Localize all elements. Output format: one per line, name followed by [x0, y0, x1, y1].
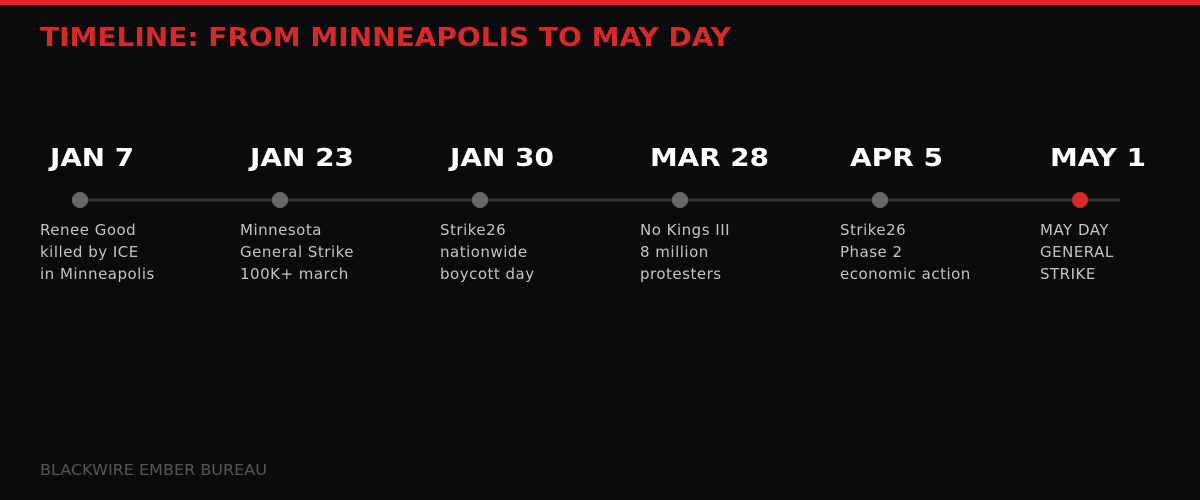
event: JAN 30: nationwide	[440, 243, 528, 261]
event: MAR 28: MAR 28	[650, 143, 769, 172]
event: MAR 28: No Kings III	[640, 221, 730, 239]
event: APR 5: APR 5	[850, 143, 943, 172]
event: MAR 28: protesters	[640, 265, 722, 283]
event: MAY 1: GENERAL	[1040, 243, 1114, 261]
event: MAY 1	[1040, 143, 1146, 283]
event: MAR 28: 8 million	[640, 243, 709, 261]
timeline line	[80, 198, 1120, 202]
event: JAN 23: Minnesota	[240, 221, 322, 239]
event: JAN 30: Strike26	[440, 221, 506, 239]
event: MAY 1: STRIKE	[1040, 265, 1096, 283]
event: APR 5: Strike26	[840, 221, 906, 239]
event: JAN 30: JAN 30	[448, 143, 554, 172]
event: JAN 23	[240, 143, 354, 283]
event: APR 5	[840, 143, 971, 283]
event: APR 5: Phase 2	[840, 243, 903, 261]
event: JAN 7: killed by ICE	[40, 243, 139, 261]
event: JAN 23: General Strike	[240, 243, 354, 261]
event: JAN 23: JAN 23	[248, 143, 354, 172]
event: JAN 7: in Minneapolis	[40, 265, 155, 283]
event: APR 5: economic action	[840, 265, 971, 283]
event: MAY 1: MAY 1	[1050, 143, 1146, 172]
event: JAN 7	[40, 143, 155, 283]
event: JAN 30	[440, 143, 554, 283]
footer: BLACKWIRE EMBER BUREAU	[40, 461, 267, 479]
event: JAN 30: boycott day	[440, 265, 535, 283]
title: TIMELINE: FROM MINNEAPOLIS TO MAY DAY	[40, 23, 732, 53]
event: MAY 1: MAY DAY	[1040, 221, 1109, 239]
event: JAN 7: Renee Good	[40, 221, 136, 239]
event: JAN 7: JAN 7	[48, 143, 134, 172]
event: MAR 28	[640, 143, 769, 283]
event: JAN 23: 100K+ march	[240, 265, 349, 283]
